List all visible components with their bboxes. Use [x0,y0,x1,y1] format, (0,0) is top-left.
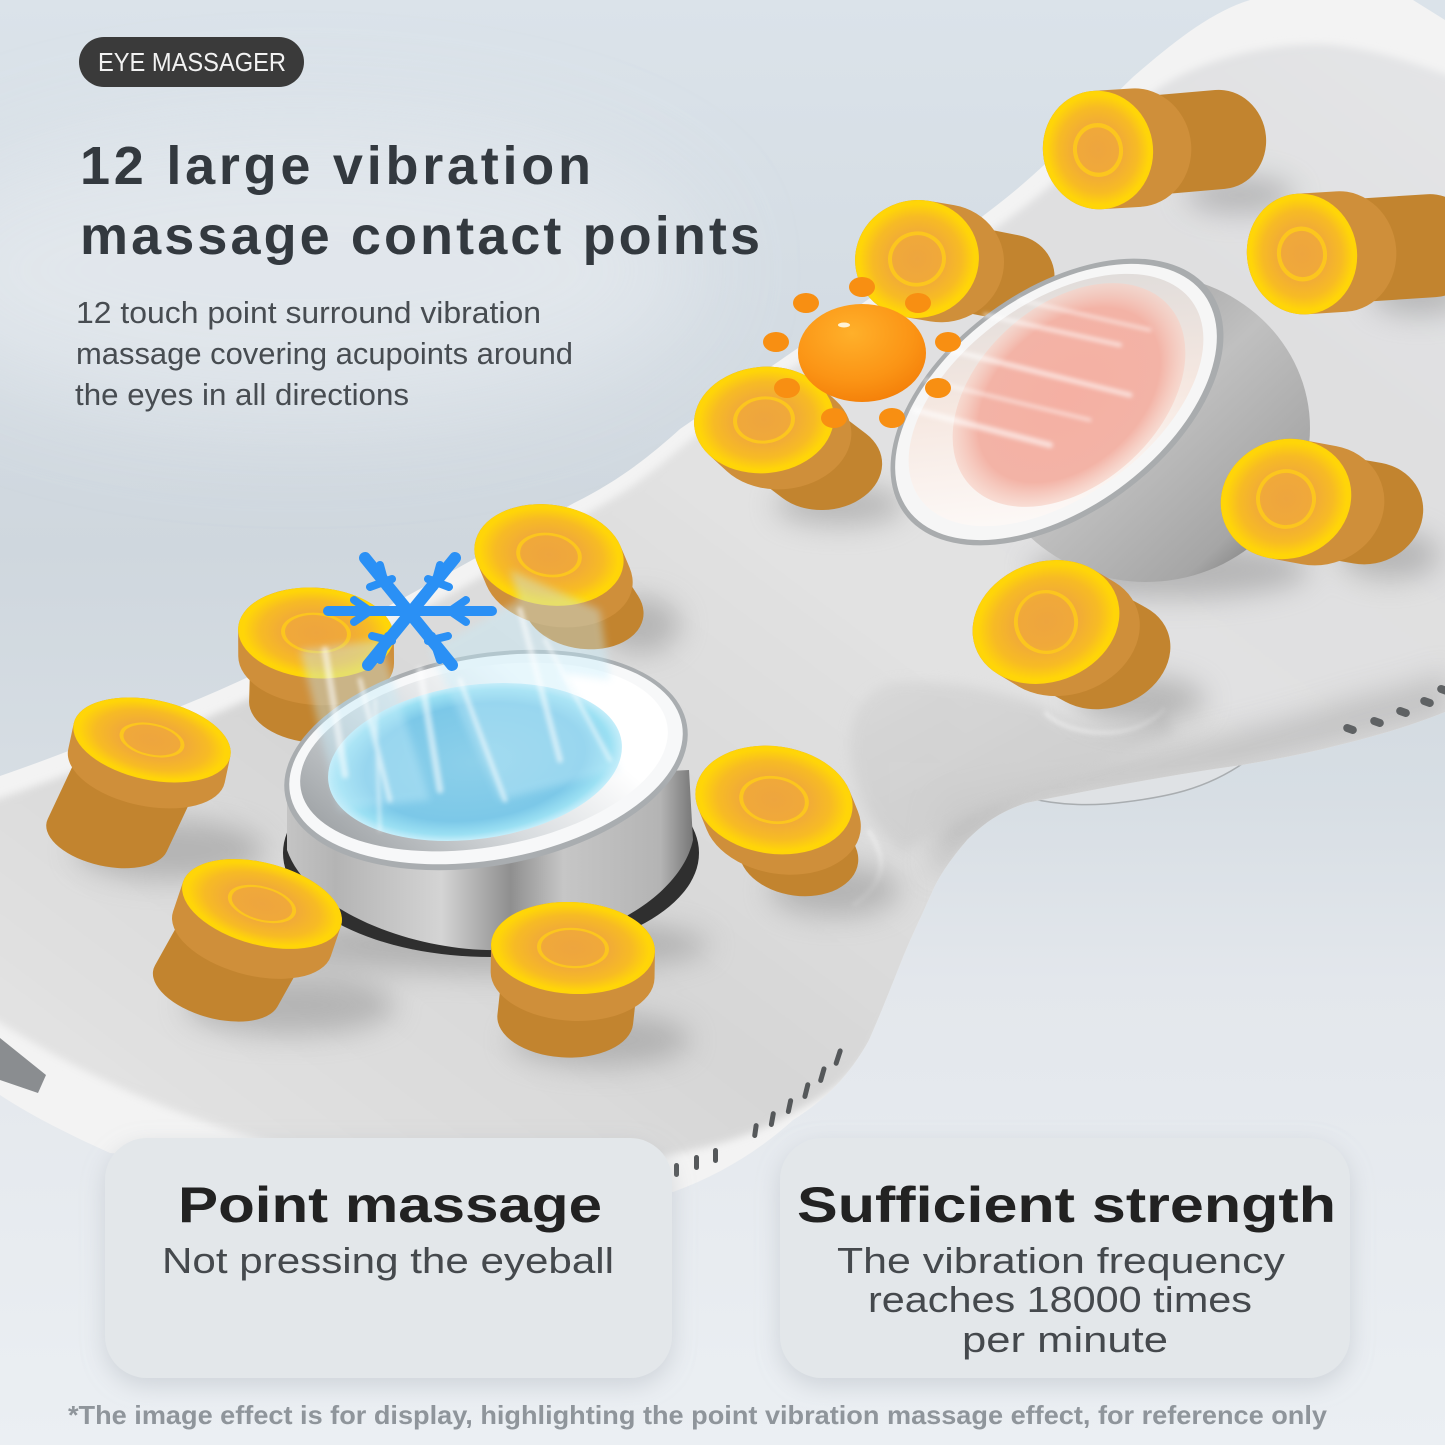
subtext: The vibration frequency [837,1240,1285,1281]
contact point: right eye bottom [955,540,1137,704]
cold beams [300,570,620,810]
nose bridge [850,682,1175,853]
body inner face [0,44,1445,1160]
title: 12 large vibration [80,136,591,196]
metal eye cup: cold [267,570,705,957]
cup base [287,770,693,950]
snowflake icon [328,558,492,665]
heading: Sufficient strength [797,1177,1336,1233]
contact point: right eye right [1204,419,1374,577]
contact point: right eye top far [1034,70,1228,218]
vents: right [1342,684,1445,735]
description: 12 touch point surround vibration [76,295,541,330]
cup rim [267,620,705,900]
contact point: left eye right [688,736,860,864]
vents: lower [674,1048,843,1177]
contact point: right eye top left [846,186,1014,328]
title: massage contact points [80,206,760,266]
sun icon [763,277,961,428]
description [75,295,573,412]
footnote: *The image effect is for display, highlighting the point vibration massage effect, for reference only [68,1400,1328,1430]
sun body [798,304,926,402]
warm rays [915,300,1150,445]
warm cup inner [863,223,1249,577]
subtext: Not pressing the eyeball [162,1240,614,1281]
contact point: left eye upper left [233,582,397,710]
pink lens [909,238,1229,552]
contact point: left eye bottom [487,898,657,1024]
warm cup rim [838,200,1276,604]
contact point: left eye top [468,495,630,615]
badge: eye massager: EYE MASSAGER [98,47,286,77]
contact point: left eye lower left [159,843,352,1013]
connector port [0,1038,46,1093]
sun dots [763,277,961,428]
cup inner surface [285,636,683,878]
description: massage covering acupoints around [76,336,573,371]
cold rays [325,610,610,830]
metal eye cup: warm [838,200,1310,604]
blue lens [318,665,632,859]
contact point: left eye far left [52,684,239,857]
cup back [982,274,1310,582]
dimple highlights [869,712,1155,860]
subtext: reaches 18000 times [868,1279,1252,1320]
cup base shadow [283,749,699,957]
title [80,136,760,266]
panel: point massage [105,1138,672,1378]
subtext [837,1240,1285,1360]
soft contact shadows [75,177,1445,1066]
panel: sufficient strength [780,1138,1350,1378]
heading: Point massage [178,1177,602,1233]
soft highlight behind text [0,120,700,420]
subtext: per minute [962,1319,1168,1360]
contact point: right eye left [690,361,838,479]
badge: eye massager [79,37,304,87]
description: the eyes in all directions [75,377,409,412]
lower strap [1030,762,1245,805]
contact point: right eye upper right [1237,172,1440,323]
lower right shading [930,670,1445,880]
